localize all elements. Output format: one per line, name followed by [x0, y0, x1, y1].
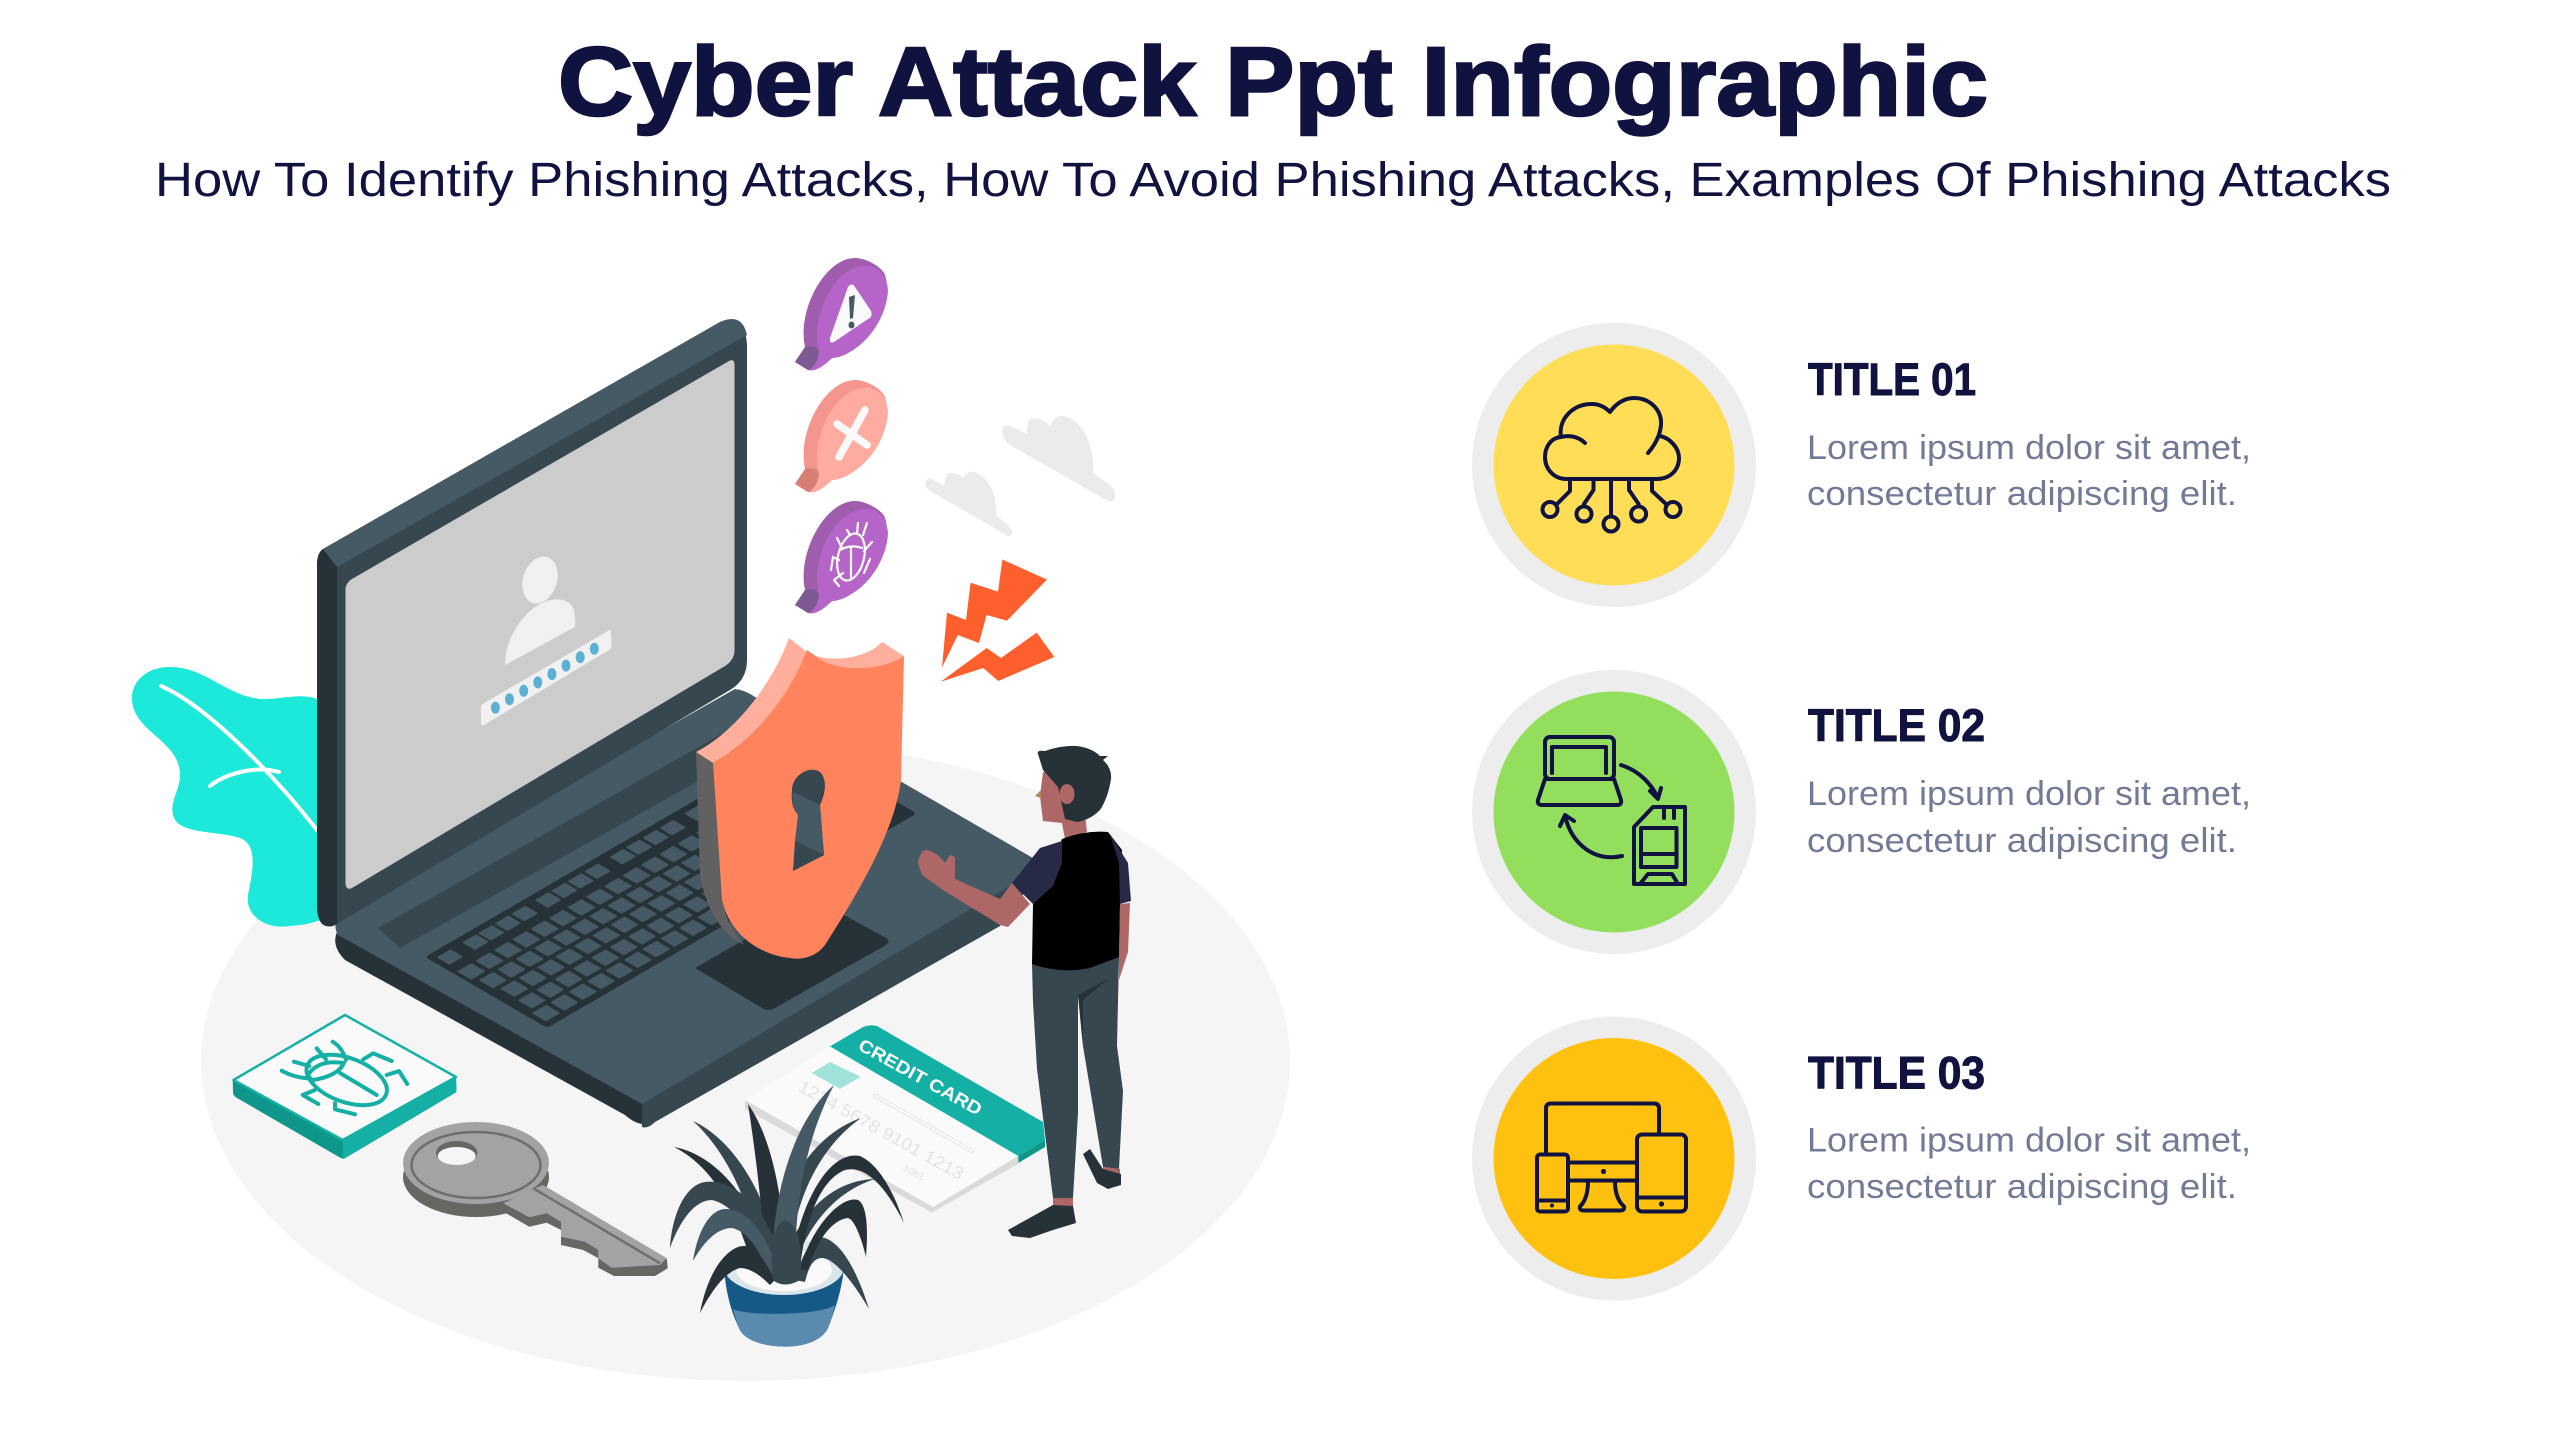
potted plant	[670, 1085, 904, 1347]
laptop base	[335, 689, 1045, 1127]
alert bubble: bug	[795, 501, 888, 613]
touchpad	[695, 899, 888, 1010]
leaves	[670, 1085, 904, 1313]
cloud large	[1002, 416, 1115, 502]
item 02	[1472, 670, 2251, 954]
key	[403, 1122, 668, 1276]
credit card: 1234 5678 9101 1213	[795, 1077, 967, 1184]
description 02: Lorem ipsum dolor sit amet,	[1807, 775, 2251, 813]
illustration: cyber attack scene	[132, 258, 1290, 1381]
bug card	[233, 1015, 456, 1159]
description 01: Lorem ipsum dolor sit amet,	[1807, 429, 2251, 467]
item 03	[1472, 1016, 2251, 1300]
laptop screen lid	[317, 319, 747, 927]
heading 03: TITLE 03	[1808, 1048, 1985, 1098]
t-shirt	[1032, 832, 1122, 970]
subtitle: How To Identify Phishing Attacks, How To Avoid Phishing Attacks, Examples Of Phishing Attacks	[155, 154, 2391, 207]
description 02: consectetur adipiscing elit.	[1807, 822, 2237, 860]
alert bubble: cross	[795, 380, 888, 492]
function row	[437, 753, 802, 965]
description 02	[1807, 775, 2251, 860]
credit card: 1083	[901, 1163, 926, 1184]
credit card: CREDIT CARD	[855, 1035, 985, 1119]
left arm	[918, 850, 1030, 927]
hinge strip	[378, 718, 770, 948]
cloud small	[925, 472, 1012, 536]
icon disc: responsive devices	[1472, 1016, 1756, 1300]
back leg and trousers	[1032, 957, 1123, 1198]
sleeves	[1012, 841, 1062, 904]
icon disc: laptop and memory card exchange	[1472, 670, 1756, 954]
credit card	[745, 1025, 1045, 1212]
heading 01: TITLE 01	[1808, 354, 1976, 405]
neck and face	[1040, 770, 1087, 839]
description 01	[1807, 429, 2251, 513]
keyhole	[792, 770, 825, 871]
heading 02: TITLE 02	[1808, 700, 1985, 751]
description 03: consectetur adipiscing elit.	[1807, 1168, 2237, 1206]
password field	[481, 630, 612, 726]
icon disc: cloud network	[1472, 323, 1756, 607]
person	[918, 746, 1131, 1238]
ear	[1060, 784, 1074, 804]
pot	[724, 1267, 844, 1347]
title: Cyber Attack Ppt Infographic	[558, 27, 1988, 136]
description 03: Lorem ipsum dolor sit amet,	[1807, 1122, 2251, 1160]
description 03	[1807, 1122, 2251, 1206]
keyboard	[425, 742, 917, 1028]
ground ellipse	[201, 741, 1290, 1381]
teal plant leaf	[132, 667, 330, 927]
shoes	[1008, 1205, 1076, 1238]
hair	[1038, 746, 1111, 822]
item 01	[1472, 323, 2251, 607]
chip	[812, 1062, 861, 1089]
alert bubble: warning	[795, 258, 888, 370]
signature strip	[875, 1096, 972, 1151]
screen display	[346, 360, 734, 889]
lightning bolts	[941, 560, 1054, 682]
user avatar on screen	[505, 552, 575, 665]
shield	[696, 638, 904, 959]
right arm	[1119, 903, 1130, 980]
description 01: consectetur adipiscing elit.	[1807, 475, 2237, 513]
